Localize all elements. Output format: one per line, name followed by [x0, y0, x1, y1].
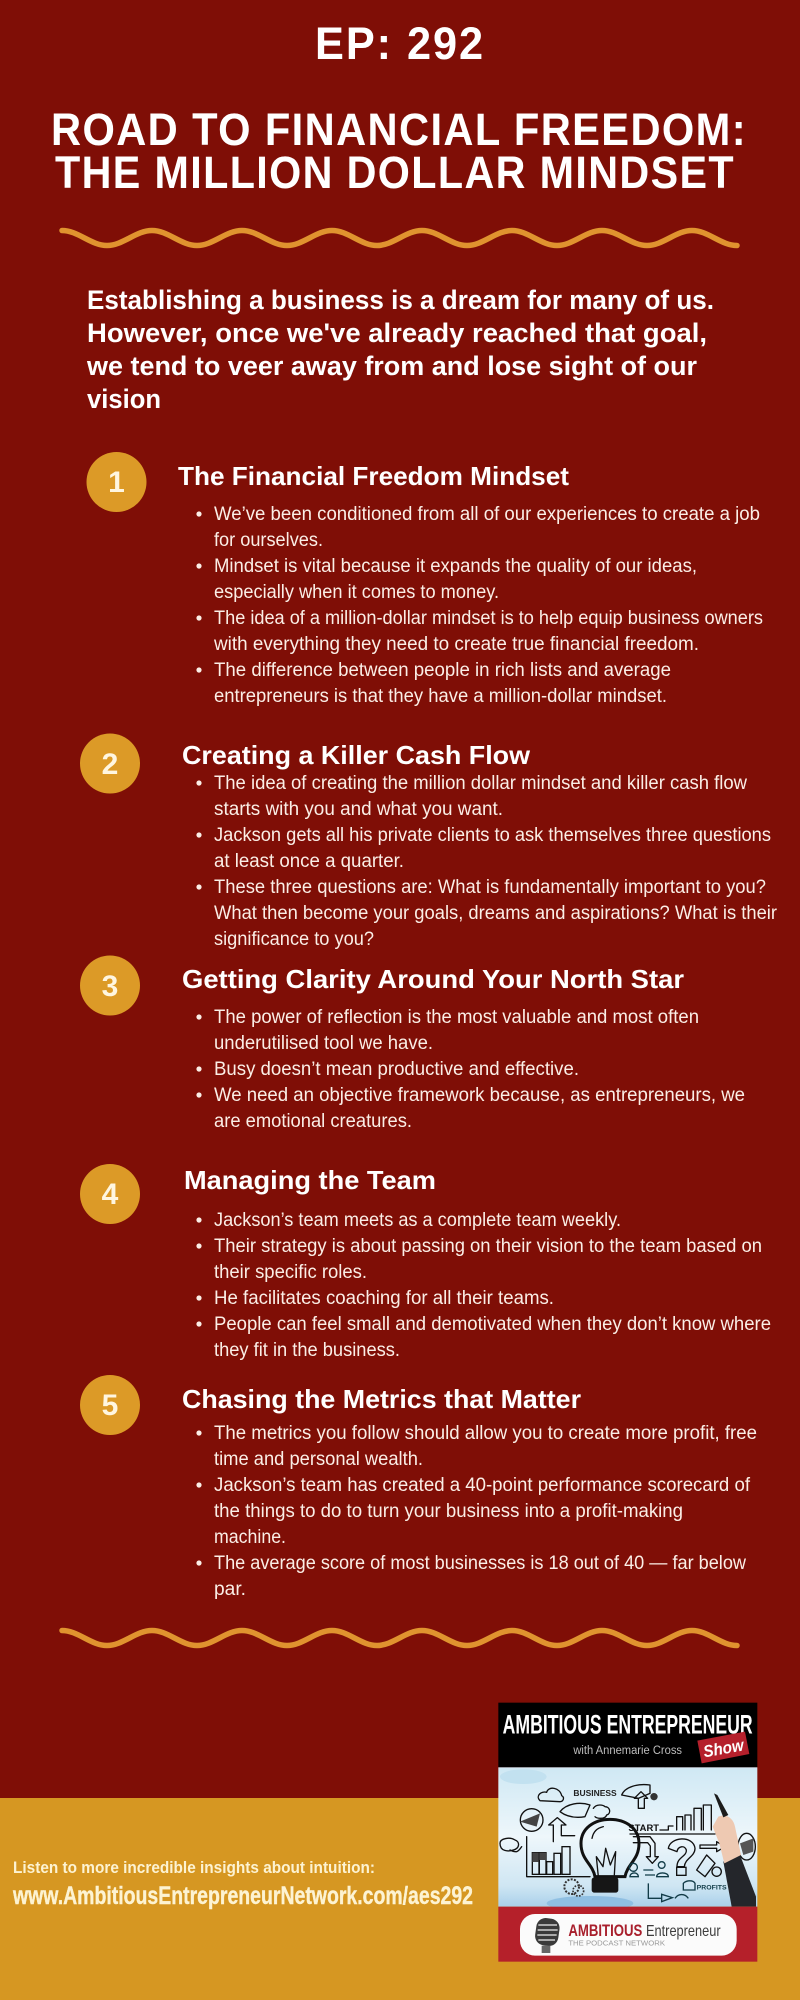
cover sketch illustration — [498, 1767, 757, 1911]
bullet list: section 5: The metrics you follow should allow you to create more profit, free — [214, 1423, 757, 1444]
bullet list: section 3 — [196, 1007, 745, 1132]
number badge 2: 2 — [102, 748, 118, 781]
bullet list: section 5: the things to do to turn your business into a profit-making — [214, 1501, 683, 1522]
intro text block: vision — [87, 384, 161, 414]
intro text block: we tend to veer away from and lose sight of our — [86, 351, 697, 381]
bullet list: section 4: He facilitates coaching for all their teams. — [214, 1288, 554, 1309]
cover footer: network logo: THE PODCAST NETWORK — [568, 1938, 666, 1947]
number badge 5: 5 — [102, 1389, 118, 1422]
sketch doodles: BUSINESS — [573, 1788, 617, 1798]
bullet list: section 3: underutilised tool we have. — [214, 1033, 433, 1054]
panel: section 1 — [86, 452, 763, 707]
cover header: show name — [498, 1703, 757, 1767]
bullet list: section 2: These three questions are: What is fundamentally important to you? — [214, 877, 766, 898]
number badge 1: 1 — [108, 466, 125, 499]
bullet list: section 2: Jackson gets all his private clients to ask themselves three questions — [214, 825, 771, 846]
bullet list: section 5: time and personal wealth. — [214, 1449, 423, 1470]
bullet list: section 5: machine. — [214, 1527, 286, 1548]
bullet list: section 5: Jackson’s team has created a 40-point performance scorecard of — [214, 1475, 751, 1496]
title — [51, 104, 747, 198]
bullet list: section 4 — [196, 1210, 771, 1361]
bullet list: section 2: significance to you? — [214, 929, 374, 950]
podcast cover image — [498, 1703, 757, 1962]
bullet list: section 3: Busy doesn’t mean productive and effective. — [214, 1059, 579, 1080]
number badge 3: 3 — [102, 970, 118, 1003]
bullet list: section 2: starts with you and what you want. — [214, 799, 503, 820]
bullet list: section 2: The idea of creating the million dollar mindset and killer cash flow — [214, 773, 747, 794]
bullet list: section 5 — [196, 1423, 757, 1600]
panel: section 3 — [80, 956, 745, 1132]
cover header: show name: Show — [702, 1735, 746, 1761]
bullet list: section 4: Jackson’s team meets as a complete team weekly. — [214, 1210, 621, 1231]
title: ROAD TO FINANCIAL FREEDOM: — [51, 104, 747, 155]
bullet list: section 5: The average score of most businesses is 18 out of 40 — far below — [214, 1553, 746, 1574]
bullet list: section 2: What then become your goals, dreams and aspirations? What is their — [214, 903, 778, 924]
episode number heading: EP: 292 — [315, 18, 485, 69]
title: THE MILLION DOLLAR MINDSET — [55, 147, 735, 198]
bullet list: section 1: The idea of a million-dollar mindset is to help equip business owners — [214, 608, 763, 629]
bullet list: section 3: are emotional creatures. — [214, 1111, 412, 1132]
bullet list: section 3: The power of reflection is the most valuable and most often — [214, 1007, 699, 1028]
heading: Chasing the Metrics that Matter: Chasing the Metrics that Matter — [182, 1384, 581, 1414]
hand with pen — [713, 1793, 756, 1907]
sketch doodles: START — [628, 1823, 659, 1833]
left bar chart — [527, 1837, 590, 1877]
cover header: show name: with Annemarie Cross — [572, 1743, 682, 1757]
bullet list: section 1: The difference between people in rich lists and average — [214, 660, 671, 681]
bullet list: section 1: for ourselves. — [214, 530, 323, 551]
footer band — [0, 1798, 800, 2000]
heading: The Financial Freedom Mindset: The Financial Freedom Mindset — [178, 461, 569, 491]
bullet list: section 3: We need an objective framework because, as entrepreneurs, we — [214, 1085, 745, 1106]
bullet list: section 1: with everything they need to create true financial freedom. — [213, 634, 699, 655]
intro text block: Establishing a business is a dream for many of us. — [87, 285, 714, 315]
bullet list: section 1: especially when it comes to money. — [214, 582, 499, 603]
intro text block — [86, 285, 714, 414]
cover footer: network logo: AMBITIOUS — [568, 1921, 642, 1940]
bullet list: section 4: People can feel small and demotivated when they don’t know where — [214, 1314, 771, 1335]
heading: Managing the Team: Managing the Team — [184, 1165, 436, 1195]
number badge 4 — [80, 1164, 140, 1224]
number badge 1 — [86, 452, 146, 512]
heading: Getting Clarity Around Your North Star: Getting Clarity Around Your North Star — [182, 964, 684, 994]
bulb — [581, 1819, 639, 1893]
cover footer: network logo: Entrepreneur — [646, 1923, 721, 1940]
sketch doodles — [500, 1785, 755, 1902]
bullet list: section 5: par. — [214, 1579, 246, 1600]
number badge 5 — [80, 1375, 140, 1435]
microphone icon — [534, 1917, 561, 1953]
bullet list: section 2 — [196, 773, 778, 950]
bullet list: section 1: We’ve been conditioned from all of our experiences to create a job — [214, 504, 760, 525]
number badge 3 — [80, 956, 140, 1016]
footer call to action text: Listen to more incredible insights about intuition: — [13, 1859, 375, 1877]
sketch doodles: PROFITS — [697, 1884, 727, 1891]
footer call to action text: www.AmbitiousEntrepreneurNetwork.com/aes292 — [12, 1882, 473, 1910]
bullet list: section 4: Their strategy is about passing on their vision to the team based on — [214, 1236, 762, 1257]
panel: section 5 — [80, 1375, 757, 1600]
number badge 4: 4 — [102, 1178, 119, 1211]
number badge 2 — [80, 734, 140, 794]
bullet list: section 4: their specific roles. — [214, 1262, 367, 1283]
bullet list: section 2: at least once a quarter. — [214, 851, 404, 872]
bullet list: section 1 — [196, 504, 763, 707]
bullet list: section 4: they fit in the business. — [214, 1340, 400, 1361]
panel: section 2 — [80, 734, 778, 950]
panel: section 4 — [80, 1164, 771, 1361]
cover footer: network logo — [498, 1907, 757, 1962]
heading: Creating a Killer Cash Flow: Creating a Killer Cash Flow — [182, 740, 531, 770]
footer call to action text — [12, 1859, 473, 1910]
bullet list: section 1: entrepreneurs is that they have a million-dollar mindset. — [214, 686, 667, 707]
bullet list: section 1: Mindset is vital because it expands the quality of our ideas, — [214, 556, 697, 577]
intro text block: However, once we've already reached that goal, — [87, 318, 707, 348]
